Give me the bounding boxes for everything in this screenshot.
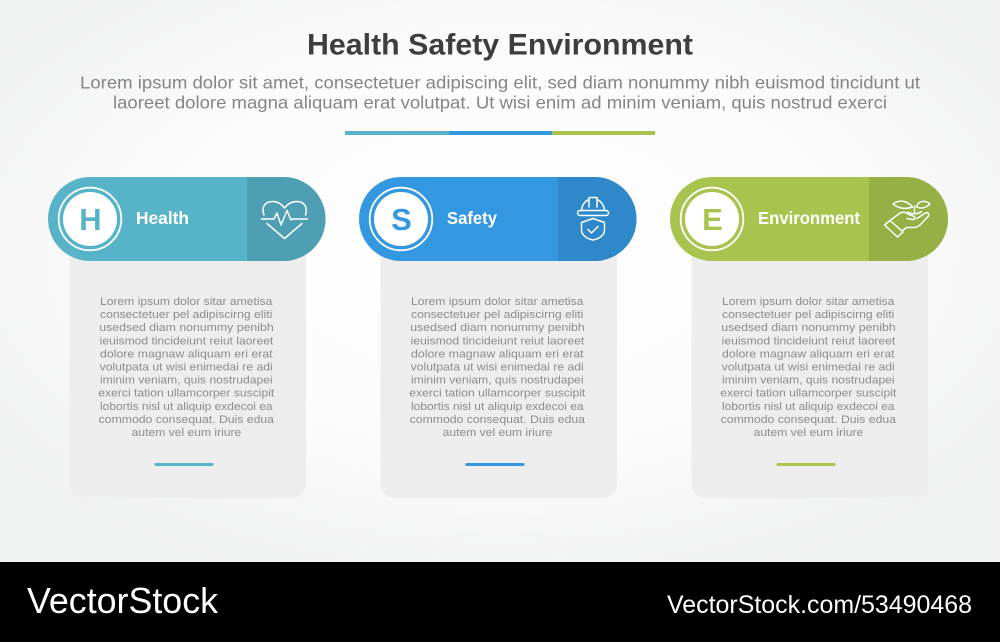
subtitle: laoreet dolore magna aliquam erat volutpat. Ut wisi enim ad minim veniam, quis nostrud exerci <box>113 92 887 112</box>
footer brand: VectorStock <box>27 580 219 621</box>
safety body text: volutpata ut wisi enimedai re adi <box>411 362 584 374</box>
health body text: autem vel eum iriure <box>132 427 241 439</box>
icon: heart with pulse <box>262 202 308 238</box>
safety body text: usedsed diam nonummy penibh <box>410 322 585 334</box>
health label: Health <box>136 208 189 228</box>
health letter badge <box>59 188 121 250</box>
health body text: Lorem ipsum dolor sitar ametisa <box>100 296 273 308</box>
environment body text: autem vel eum iriure <box>754 427 863 439</box>
health body text: lobortis nisl ut aliquip exdecoi ea <box>100 401 273 413</box>
safety card background <box>380 250 617 498</box>
tri-colour divider <box>345 131 655 135</box>
safety body text <box>409 296 586 439</box>
environment letter badge <box>681 188 743 250</box>
health pill <box>48 177 326 261</box>
environment card background <box>692 250 928 498</box>
icon: helmet and shield <box>578 198 608 240</box>
environment body text: exerci tation ullamcorper suscipit <box>720 388 897 400</box>
environment body text: Lorem ipsum dolor sitar ametisa <box>722 296 895 308</box>
health body text: commodo consequat. Duis edua <box>99 414 275 426</box>
environment body text: ieuismod tincideiunt reiut laoreet <box>722 335 896 347</box>
environment body text: commodo consequat. Duis edua <box>721 414 897 426</box>
health accent line <box>154 463 214 466</box>
health body text: exerci tation ullamcorper suscipit <box>98 388 275 400</box>
footer bar <box>0 562 1000 642</box>
environment label: Environment <box>758 208 860 228</box>
health body text <box>98 296 275 439</box>
environment body text: volutpata ut wisi enimedai re adi <box>722 362 895 374</box>
environment body text: iminim veniam, quis nostrudapei <box>722 375 895 387</box>
health body text: consectetuer pel adipiscirng eliti <box>100 309 272 321</box>
title: Health Safety Environment <box>307 28 693 62</box>
health body text: iminim veniam, quis nostrudapei <box>100 375 273 387</box>
health letter badge: H <box>79 202 102 237</box>
panel: environment <box>670 177 948 498</box>
safety letter badge: S <box>391 202 412 237</box>
health body text: volutpata ut wisi enimedai re adi <box>100 362 273 374</box>
environment accent line <box>776 463 836 466</box>
icon: hand holding plant <box>884 201 930 237</box>
safety body text: dolore magnaw aliquam eri erat <box>411 348 584 360</box>
safety letter badge <box>370 188 432 250</box>
environment body text <box>720 296 897 439</box>
environment body text: usedsed diam nonummy penibh <box>721 322 896 334</box>
safety body text: autem vel eum iriure <box>443 427 552 439</box>
safety pill <box>359 177 636 261</box>
safety body text: Lorem ipsum dolor sitar ametisa <box>411 296 584 308</box>
subtitle: Lorem ipsum dolor sit amet, consectetuer adipiscing elit, sed diam nonummy nibh euismod tincidunt ut <box>80 72 920 92</box>
safety label: Safety <box>447 208 497 228</box>
safety body text: iminim veniam, quis nostrudapei <box>411 375 584 387</box>
health card background <box>70 250 306 498</box>
subtitle <box>80 72 920 112</box>
safety body text: consectetuer pel adipiscirng eliti <box>411 309 583 321</box>
health body text: usedsed diam nonummy penibh <box>99 322 274 334</box>
footer image id: VectorStock.com/53490468 <box>667 591 972 619</box>
environment pill <box>670 177 948 261</box>
safety body text: lobortis nisl ut aliquip exdecoi ea <box>411 401 584 413</box>
safety accent line <box>466 463 524 466</box>
safety body text: commodo consequat. Duis edua <box>410 414 586 426</box>
environment letter badge: E <box>702 202 723 237</box>
safety body text: exerci tation ullamcorper suscipit <box>409 388 586 400</box>
environment body text: consectetuer pel adipiscirng eliti <box>722 309 894 321</box>
environment body text: lobortis nisl ut aliquip exdecoi ea <box>722 401 895 413</box>
health body text: dolore magnaw aliquam eri erat <box>100 348 273 360</box>
panel: safety <box>359 177 636 498</box>
environment body text: dolore magnaw aliquam eri erat <box>722 348 895 360</box>
panel: health <box>48 177 326 498</box>
health body text: ieuismod tincideiunt reiut laoreet <box>100 335 274 347</box>
safety body text: ieuismod tincideiunt reiut laoreet <box>411 335 585 347</box>
